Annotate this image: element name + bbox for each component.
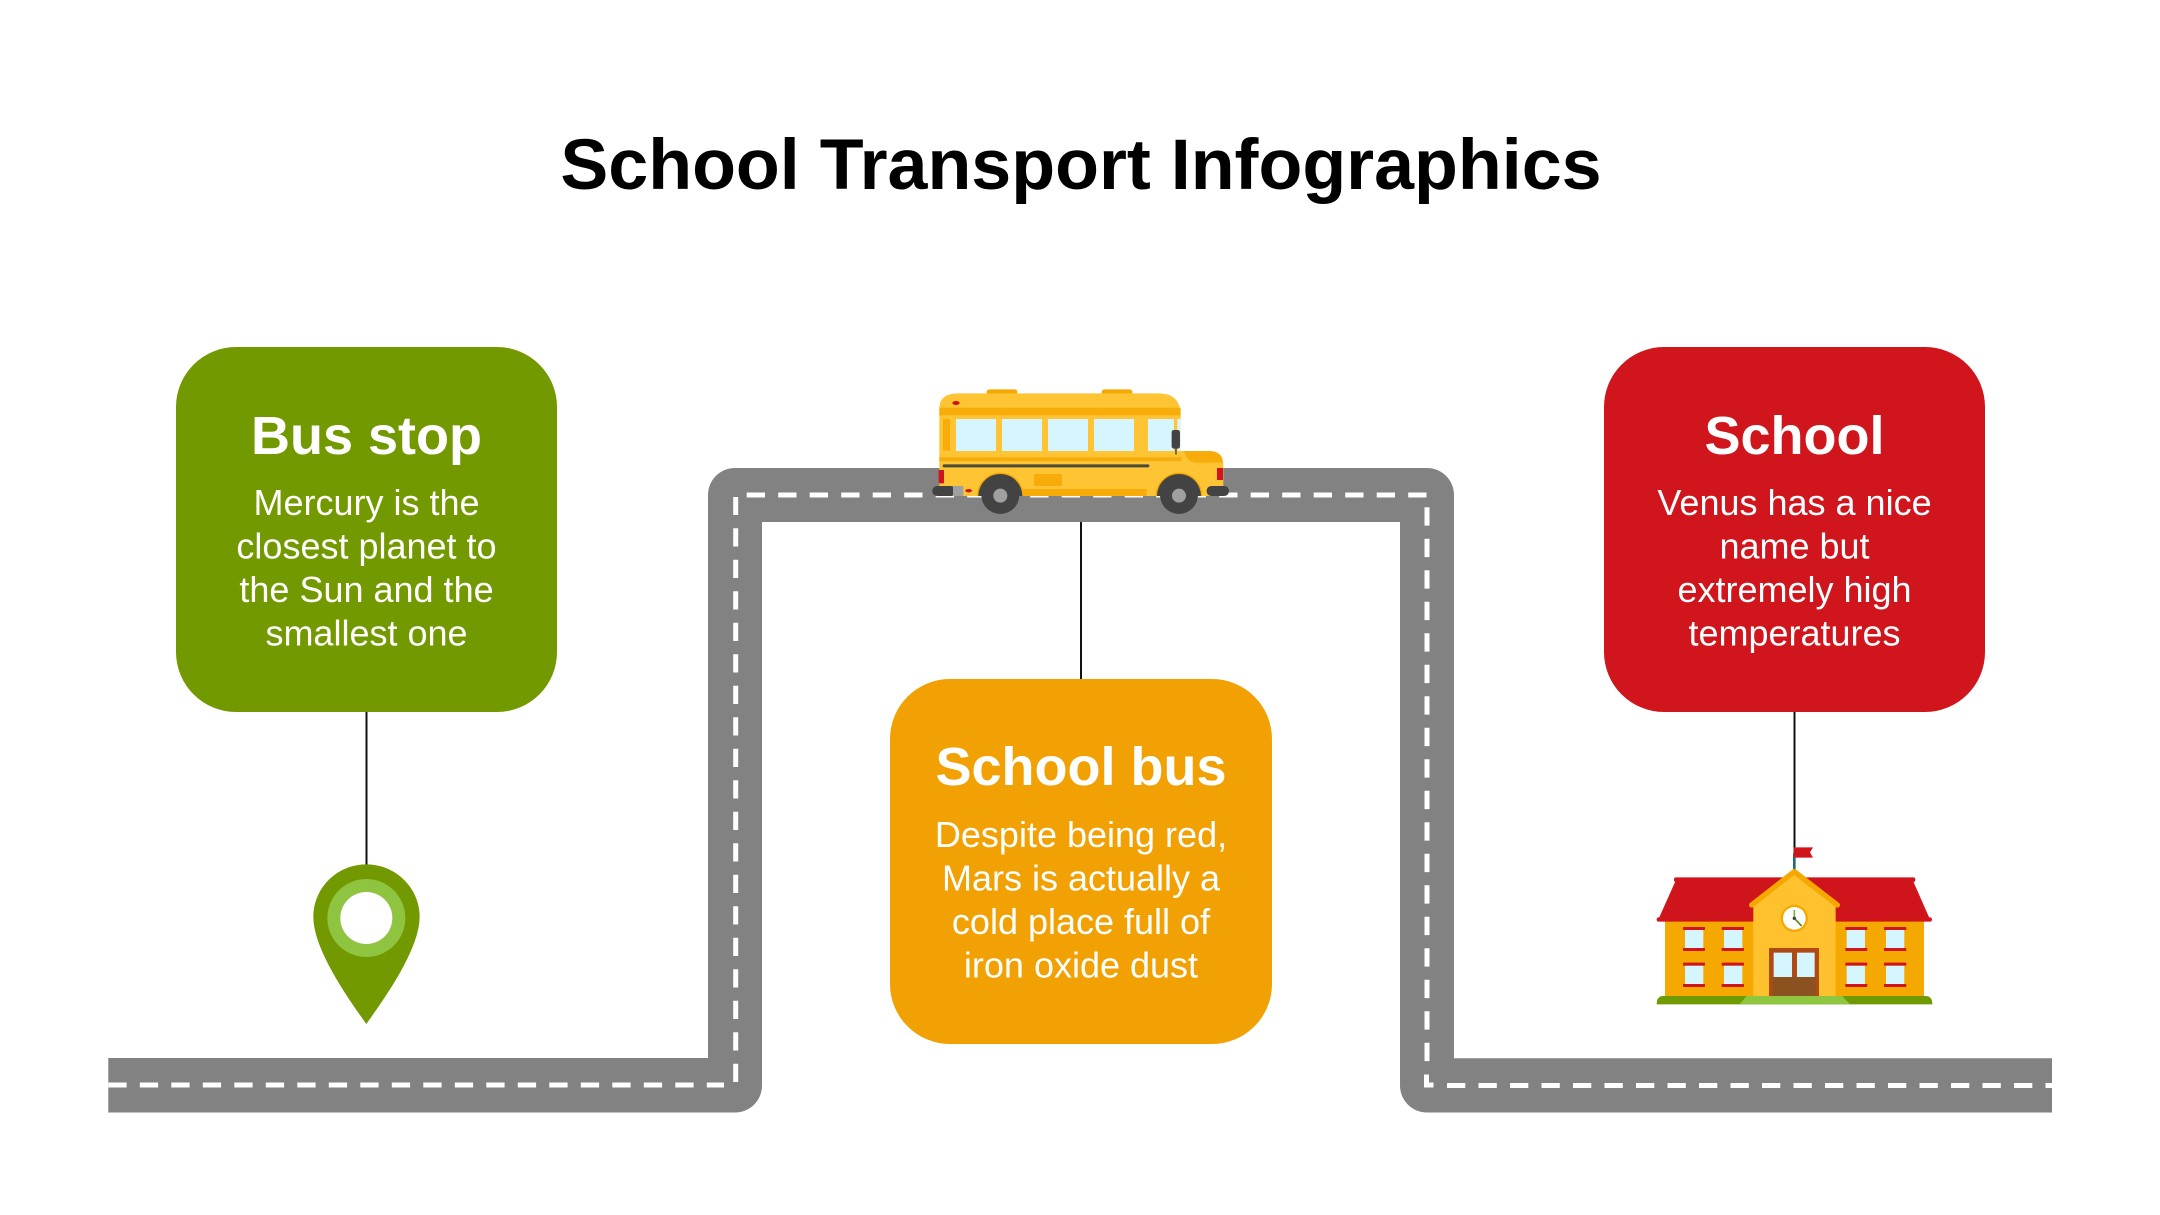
heading: bus stop: Bus stop — [251, 406, 482, 466]
text: school description: temperatures — [1688, 612, 1901, 654]
text: school bus description — [935, 814, 1227, 986]
panel: bus stop — [176, 347, 557, 712]
road — [108, 468, 2052, 1112]
text: bus stop description: closest planet to — [236, 526, 497, 566]
text: bus stop description: the Sun and the — [239, 569, 494, 610]
text: school description: extremely high — [1677, 569, 1912, 610]
text: school bus description: iron oxide dust — [964, 944, 1198, 986]
connector: school — [1794, 712, 1796, 855]
text: bus stop description: Mercury is the — [253, 482, 480, 523]
icon: map pin — [313, 864, 420, 1024]
text: school description — [1657, 482, 1932, 654]
connector: school bus — [1080, 522, 1082, 680]
text: bus stop description: smallest one — [265, 612, 468, 654]
panel: school bus — [890, 679, 1272, 1044]
text: school description: name but — [1719, 526, 1870, 566]
title: School Transport Infographics — [560, 125, 1602, 205]
heading: school: School — [1704, 406, 1885, 466]
text: school bus description: Mars is actually a — [942, 858, 1221, 898]
connector: bus stop — [366, 712, 368, 866]
text: school bus description: Despite being red, — [935, 814, 1227, 855]
text: bus stop description — [236, 482, 497, 654]
text: school description: Venus has a nice — [1657, 482, 1932, 523]
heading: school bus: School bus — [935, 737, 1227, 797]
panel: school — [1604, 347, 1985, 712]
text: school bus description: cold place full of — [952, 901, 1211, 942]
icon: school building — [1657, 847, 1932, 1004]
icon: school bus — [932, 389, 1229, 514]
